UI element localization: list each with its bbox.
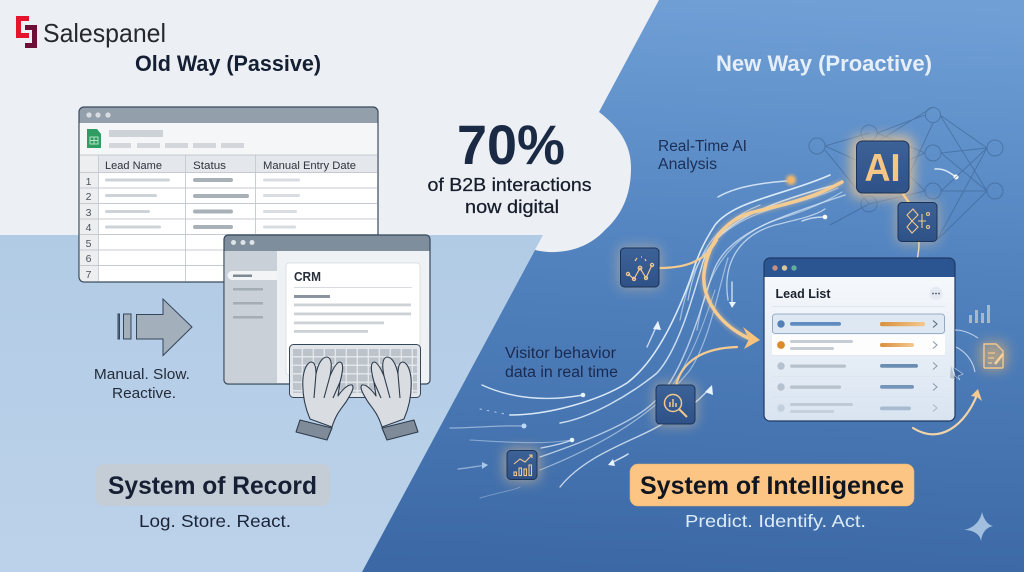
- text: real-time AI analysis: Real-Time AI: [658, 138, 747, 155]
- lead row 2 orange: [772, 334, 945, 355]
- lead row 3: [777, 362, 937, 370]
- icon: AI chip: AI: [864, 147, 900, 190]
- icon: wave chart box: [618, 246, 661, 289]
- lead list heading: Lead List: [776, 286, 831, 301]
- statistic number: 70%: [457, 113, 565, 176]
- table grid: [80, 155, 377, 281]
- toolbar placeholders: [109, 130, 244, 148]
- left hand: [296, 357, 353, 440]
- table header row: Manual Entry Date: [263, 160, 356, 172]
- logo mark: [16, 16, 37, 48]
- text: manual slow reactive: Manual. Slow.: [94, 366, 190, 383]
- statistic caption: now digital: [465, 197, 559, 217]
- background: blue right panel with circular notch: [362, 0, 1024, 572]
- icon: cursor: [950, 366, 963, 380]
- arrowhead: return loop: [971, 389, 982, 401]
- badge: system of intelligence: System of Intelligence: [640, 472, 904, 500]
- flow dots and arrow tips: [482, 174, 958, 469]
- badge: system of record: System of Record: [108, 472, 317, 500]
- feedback arcs: [955, 330, 978, 372]
- lead list window: [764, 258, 955, 421]
- orange glow beneath main stream: [704, 182, 842, 338]
- table header row: Lead Name: [105, 160, 162, 172]
- row numbers: 2: [86, 191, 92, 203]
- icon: AI chip: [851, 136, 914, 198]
- background: light blue lower left panel: [0, 235, 543, 572]
- row numbers: 4: [86, 222, 92, 234]
- flow lines: white data streams: [450, 169, 956, 498]
- orange glowing node: [786, 175, 796, 185]
- row numbers: 6: [86, 253, 92, 265]
- lead row 1 highlighted: [772, 314, 944, 334]
- CRM content card: [286, 263, 420, 375]
- CRM sidebar items: [228, 271, 277, 318]
- logo wordmark: Salespanel: [43, 18, 166, 48]
- row numbers: [86, 176, 92, 281]
- icon: growth chart box: [504, 448, 540, 482]
- arrow: slow manual process: [118, 299, 192, 356]
- spreadsheet window: [79, 107, 378, 282]
- icon: green sheets file: [87, 129, 101, 148]
- icon: document with pencil: [980, 342, 1007, 370]
- row numbers: 3: [86, 207, 92, 219]
- lead list title bar: [764, 258, 955, 277]
- CRM content card: CRM: [294, 269, 321, 284]
- arrowhead: into lead list: [743, 327, 760, 349]
- heading: old way: Old Way (Passive): [135, 51, 321, 76]
- heading: new way: New Way (Proactive): [716, 51, 932, 76]
- text: log store react: Log. Store. React.: [139, 511, 291, 531]
- lead row 4: [777, 383, 937, 391]
- icon: typing hands: [296, 357, 418, 440]
- text: predict identify act: Predict. Identify. Act.: [685, 511, 866, 531]
- badge: system of intelligence: [630, 464, 914, 506]
- spreadsheet title bar: [79, 107, 378, 123]
- text: real-time AI analysis: Analysis: [658, 156, 717, 173]
- text: visitor behavior: data in real time: [505, 364, 618, 381]
- text: manual slow reactive: Reactive.: [112, 385, 176, 402]
- callout: 70 percent statistic: [427, 113, 597, 217]
- right hand: [361, 357, 418, 440]
- icon: neural cluster box: [896, 200, 939, 244]
- CRM window: [224, 235, 430, 384]
- row numbers: 1: [86, 176, 92, 188]
- icon: sparkle: [964, 512, 993, 541]
- more options button: [930, 287, 942, 300]
- lead row 5 faded: [777, 403, 937, 413]
- network links: [825, 107, 987, 240]
- table header row: Status: [193, 160, 227, 172]
- network nodes: [809, 108, 1003, 212]
- statistic caption: of B2B interactions: [427, 175, 591, 195]
- logo: Salespanel: [16, 16, 166, 48]
- flow lines: orange insight streams: [659, 182, 977, 434]
- keyboard: [290, 344, 420, 398]
- table row placeholder bars: [105, 178, 300, 229]
- CRM title bar: [224, 235, 430, 251]
- badge: system of record: [96, 464, 330, 506]
- row numbers: 7: [86, 269, 92, 281]
- neural network diagram: [809, 107, 1003, 240]
- icon: small bar chart: [969, 305, 990, 323]
- text: visitor behavior: Visitor behavior: [505, 345, 616, 362]
- icon: magnifier box: [654, 383, 697, 426]
- table header row: [80, 155, 377, 281]
- row numbers: 5: [86, 238, 92, 250]
